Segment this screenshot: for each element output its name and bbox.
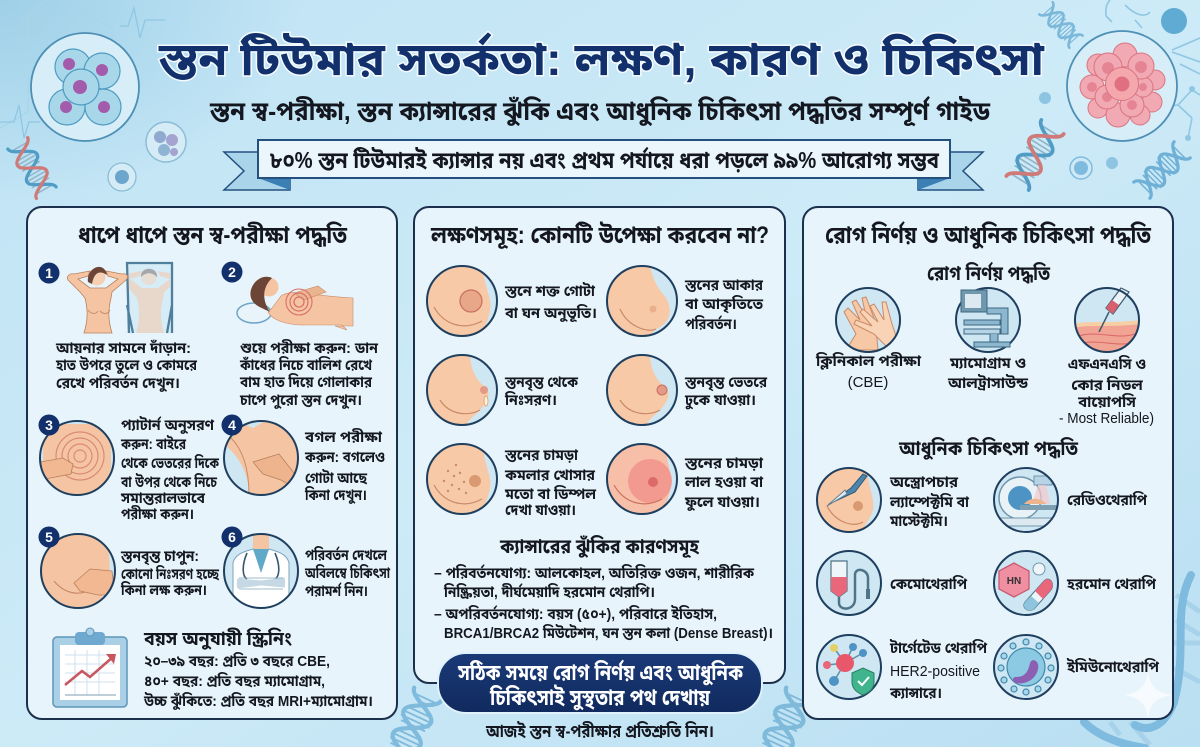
- big DNA lower right: [1110, 595, 1200, 745]
- symptom text: discharge: [504, 374, 579, 409]
- label: hormone therapy: হরমোন থেরাপি: [1066, 575, 1157, 593]
- label: targeted therapy: [889, 638, 988, 702]
- risk factors text: BRCA1/BRCA2 মিউটেশন, ঘন স্তন কলা (Dense Breast)।: [444, 624, 773, 642]
- heading: symptoms: লক্ষণসমূহ: কোনটি উপেক্ষা করবেন না?: [430, 221, 769, 249]
- step 1 text: হাত উপরে তুলে ও কোমরে: [55, 356, 198, 376]
- symptom text: shape change: পরিবর্তন।: [685, 314, 737, 333]
- risk factors text: নিষ্ক্রিয়তা, দীর্ঘমেয়াদি হরমোন থেরাপি।: [443, 582, 655, 601]
- step 6 badge: [222, 526, 242, 548]
- step 6 text: অবিলম্বে চিকিৎসা: [304, 564, 391, 582]
- step 4 text: করুন: বগলেও: [304, 449, 385, 466]
- icon: mammography machine: [956, 288, 1020, 352]
- step 2 text: চাপে পুরো স্তন দেখুন।: [239, 392, 362, 410]
- icon: chemotherapy bag: [817, 551, 881, 615]
- label: surgery: [889, 474, 970, 530]
- step 2 badge: [222, 262, 242, 282]
- symptom text: redness: লাল হওয়া বা: [684, 474, 764, 491]
- label: surgery: ল্যাম্পেক্টমি বা: [889, 493, 970, 511]
- icon: immunotherapy: [994, 635, 1058, 699]
- step 3 illustration: spiral pattern: [40, 421, 114, 495]
- step 4 text: বগল পরীক্ষা: [304, 428, 383, 446]
- symptom text: shape change: স্তনের আকার: [684, 277, 764, 294]
- symptom icon: redness: [606, 443, 677, 515]
- label: chemotherapy: কেমোথেরাপি: [890, 575, 968, 593]
- subheading: treatment: আধুনিক চিকিৎসা পদ্ধতি: [898, 436, 1079, 460]
- step 6 illustration: doctor: [224, 534, 298, 608]
- symptom text: discharge: স্তনবৃন্ত থেকে: [504, 374, 579, 392]
- step 3 badge: [38, 414, 60, 436]
- step 3 text: করুন: বাইরে: [120, 435, 187, 453]
- step 1 text: আয়নার সামনে দাঁড়ান:: [55, 338, 191, 357]
- heading: self examination: ধাপে ধাপে স্তন স্ব-পরীক্ষা পদ্ধতি: [78, 221, 348, 249]
- symptom text: shape change: [684, 277, 764, 333]
- step 1 badge: 1: [45, 265, 53, 281]
- step 6 badge: 6: [228, 529, 236, 545]
- symptom text: dimpled skin: স্তনের চামড়া: [504, 447, 579, 464]
- symptom text: discharge: নিঃসরণ।: [504, 391, 557, 409]
- label: biopsy: এফএনএসি ও: [1068, 355, 1146, 373]
- step 1 badge: [38, 262, 60, 284]
- panel: self examination: [27, 207, 397, 719]
- footer pledge: আজই স্তন স্ব-পরীক্ষার প্রতিশ্রুতি নিন।: [485, 721, 714, 741]
- risk factors heading: ক্যান্সারের ঝুঁকির কারণসমূহ: [499, 534, 700, 558]
- step 5 badge: 5: [45, 529, 53, 545]
- symptom icon: dimpled skin: [426, 443, 497, 515]
- step 1 text: রেখে পরিবর্তন দেখুন।: [56, 373, 180, 393]
- step 5 text: [120, 548, 219, 599]
- label: targeted therapy: ক্যান্সারে।: [889, 685, 942, 702]
- symptom icon: shape change: [606, 265, 677, 337]
- subheading: diagnosis: রোগ নির্ণয় পদ্ধতি: [927, 261, 1051, 285]
- label: radiotherapy: রেডিওথেরাপি: [1067, 491, 1148, 509]
- step 5 badge: [38, 526, 60, 548]
- label: clinical exam: (CBE): [848, 374, 888, 391]
- risk factors text: – অপরিবর্তনযোগ্য: বয়স (৫০+), পরিবারে ইতিহাস,: [434, 604, 717, 623]
- step 3 text: পরীক্ষা করুন।: [121, 505, 194, 523]
- label: mammogram: [947, 355, 1028, 392]
- sparkle watermark: [1124, 672, 1172, 718]
- label: immunotherapy: ইমিউনোথেরাপি: [1066, 658, 1160, 676]
- screening heading: বয়স অনুযায়ী স্ক্রিনিং: [143, 628, 292, 650]
- step 6 text: [304, 545, 391, 600]
- symptom text: dimpled skin: মতো বা ডিম্পল: [504, 485, 597, 503]
- icon: small germ: [108, 163, 136, 191]
- label: surgery: অস্ত্রোপচার: [889, 474, 959, 491]
- screening text: [143, 652, 373, 711]
- symptom text: inverted nipple: ঢুকে যাওয়া।: [684, 392, 756, 411]
- step 2 text: [239, 339, 379, 410]
- callout pill: সঠিক সময়ে রোগ নির্ণয় এবং আধুনিক: [457, 659, 744, 686]
- label: targeted therapy: HER2-positive: [890, 663, 980, 680]
- risk factors text: [434, 563, 773, 642]
- step 2 badge: 2: [228, 264, 236, 280]
- step 3 text: প্যাটার্ন অনুসরণ: [121, 415, 214, 435]
- step 4 text: গোটা আছে: [305, 469, 367, 487]
- icon: radiotherapy machine: [994, 468, 1058, 532]
- icon: clipboard chart: [53, 628, 127, 707]
- screening text: ২০–৩৯ বছর: প্রতি ৩ বছরে CBE,: [144, 652, 330, 670]
- label: biopsy: [1059, 355, 1154, 427]
- icon: healthy cells bubble: [31, 33, 139, 141]
- symptom icon: inverted nipple: [606, 354, 677, 426]
- icon: small cell cluster: [146, 122, 186, 162]
- step 4 text: কিনা দেখুন।: [304, 486, 367, 505]
- step 3 text: [120, 415, 220, 523]
- callout pill: [438, 653, 762, 713]
- callout pill: চিকিৎসাই সুস্থতার পথ দেখায়: [489, 685, 710, 711]
- label: biopsy: - Most Reliable): [1059, 411, 1154, 427]
- symptom text: dimpled skin: দেখা যাওয়া।: [505, 502, 576, 519]
- icon: biopsy needle: [1073, 288, 1141, 354]
- step 2 text: শুয়ে পরীক্ষা করুন: ডান: [240, 339, 379, 357]
- label: surgery: মাস্টেক্টমি।: [889, 512, 948, 530]
- label: biopsy: কোর নিডল: [1071, 376, 1143, 394]
- step 1 text: [55, 338, 198, 393]
- icon: clinical exam hands: [836, 288, 900, 352]
- step 5 text: কোনো নিঃসরণ হচ্ছে: [121, 565, 219, 583]
- symptom text: lump: [504, 282, 597, 324]
- title: স্তন টিউমার সতর্কতা: লক্ষণ, কারণ ও চিকিৎসা: [158, 32, 1045, 85]
- icon: hormone therapy: [994, 551, 1058, 615]
- ribbon banner: [224, 140, 983, 190]
- label: biopsy: বায়োপসি: [1077, 393, 1136, 411]
- step 4 text: [304, 428, 385, 505]
- step 4 illustration: armpit check: [224, 421, 298, 495]
- step 1 illustration: mirror: [67, 263, 180, 333]
- heading: diagnosis and treatment: রোগ নির্ণয় ও আধুনিক চিকিৎসা পদ্ধতি: [825, 221, 1152, 249]
- label: targeted therapy: টার্গেটেড থেরাপি: [889, 638, 988, 657]
- label: mammogram: আলট্রাসাউন্ড: [947, 374, 1028, 392]
- screening text: ৪০+ বছর: প্রতি বছর ম্যামোগ্রাম,: [144, 672, 325, 690]
- step 5 text: কিনা লক্ষ করুন।: [120, 581, 207, 599]
- step 4 badge: 4: [228, 417, 236, 433]
- risk factors text: – পরিবর্তনযোগ্য: আলকোহল, অতিরিক্ত ওজন, শারীরিক: [434, 563, 755, 582]
- step 3 text: সমান্তরালভাবে: [120, 490, 206, 507]
- panel: diagnosis and treatment: [803, 207, 1173, 719]
- symptom text: dimpled skin: [504, 447, 597, 519]
- step 5 illustration: nipple press: [41, 534, 115, 608]
- symptom text: redness: স্তনের চামড়া: [684, 455, 764, 472]
- symptom text: lump: স্তনে শক্ত গোটা: [504, 282, 596, 300]
- symptom text: redness: [684, 455, 764, 512]
- label: mammogram: ম্যামোগ্রাম ও: [949, 355, 1026, 372]
- step 2 illustration: lying down: [237, 277, 353, 330]
- step 3 text: থেকে ভেতরের দিকে: [121, 454, 220, 472]
- icon: surgery: [815, 466, 881, 534]
- step 2 text: বাম হাত দিয়ে গোলাকার: [239, 373, 373, 391]
- step 5 text: স্তনবৃন্ত চাপুন:: [120, 548, 199, 566]
- banner text: ৮০% স্তন টিউমারই ক্যান্সার নয় এবং প্রথম পর্যায়ে ধরা পড়লে ৯৯% আরোগ্য সম্ভব: [270, 146, 940, 173]
- symptom text: dimpled skin: কমলার খোসার: [504, 467, 596, 484]
- icon: hormone therapy: HN: [1007, 576, 1021, 587]
- panel: symptoms: [414, 207, 785, 683]
- screening text: উচ্চ ঝুঁকিতে: প্রতি বছর MRI+ম্যামোগ্রাম।: [143, 691, 373, 711]
- symptom text: inverted nipple: স্তনবৃন্ত ভেতরে: [684, 374, 768, 392]
- symptom icon: discharge: [426, 354, 497, 426]
- subtitle: স্তন স্ব-পরীক্ষা, স্তন ক্যান্সারের ঝুঁকি এবং আধুনিক চিকিৎসা পদ্ধতির সম্পূর্ণ গাইড: [209, 95, 990, 128]
- step 3 badge: 3: [45, 417, 53, 433]
- step 3 text: বা উপর থেকে নিচে: [120, 473, 218, 491]
- step 2 text: কাঁধের নিচে বালিশ রেখে: [239, 355, 372, 374]
- step 4 badge: [222, 414, 242, 436]
- symptom text: redness: ফুলে যাওয়া।: [684, 494, 760, 512]
- label: clinical exam: ক্লিনিকাল পরীক্ষা: [815, 352, 922, 371]
- step 6 text: পরামর্শ নিন।: [305, 581, 368, 600]
- symptom text: shape change: বা আকৃতিতে: [684, 295, 763, 314]
- symptom text: lump: বা ঘন অনুভূতি।: [504, 304, 597, 324]
- icon: targeted therapy: [817, 635, 881, 699]
- symptom icon: lump: [426, 265, 497, 337]
- step 6 text: পরিবর্তন দেখলে: [305, 545, 388, 564]
- symptom text: inverted nipple: [684, 374, 768, 411]
- label: clinical exam: [815, 352, 922, 391]
- icon: tumor cells bubble: [1067, 31, 1177, 141]
